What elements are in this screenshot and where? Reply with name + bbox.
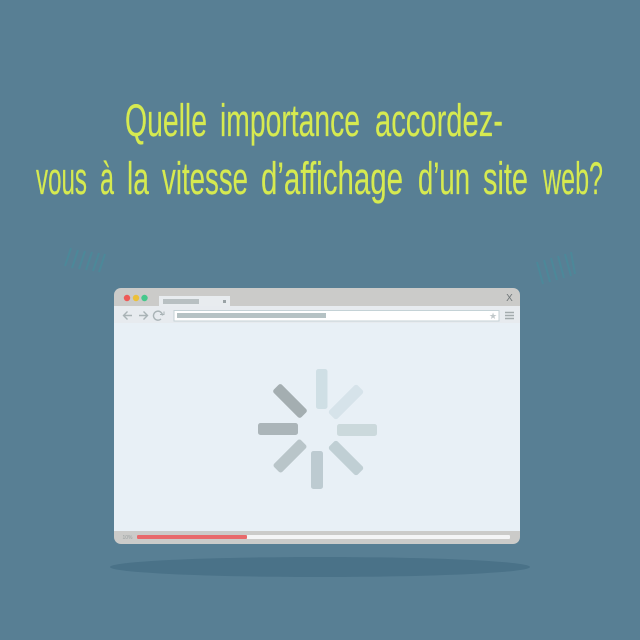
navigation icons <box>124 311 164 320</box>
menu icon <box>505 312 514 318</box>
title: Quelle <box>125 95 207 146</box>
toolbar <box>114 306 520 323</box>
title: la <box>127 153 150 204</box>
title: à <box>100 153 115 204</box>
title: importance <box>220 95 360 146</box>
title <box>36 95 603 204</box>
loading spinner <box>258 369 377 489</box>
title: d’un <box>418 153 470 204</box>
address bar <box>174 310 499 322</box>
page content area <box>114 323 520 531</box>
title: vitesse <box>162 153 248 204</box>
star icon: ★ <box>489 312 497 322</box>
browser window <box>114 288 520 544</box>
progress label: 10% <box>122 535 133 541</box>
window shadow <box>110 557 530 577</box>
title: accordez- <box>375 95 503 146</box>
window control dots <box>124 295 148 301</box>
title: d’affichage <box>261 153 403 204</box>
title: site <box>483 153 528 204</box>
close label: X <box>506 293 513 304</box>
title: vous <box>36 153 87 204</box>
window frame <box>114 288 520 544</box>
decoration: right hatch marks <box>537 252 575 284</box>
progress bar <box>137 535 510 539</box>
browser tab <box>159 296 230 306</box>
decoration: left hatch marks <box>65 248 105 272</box>
